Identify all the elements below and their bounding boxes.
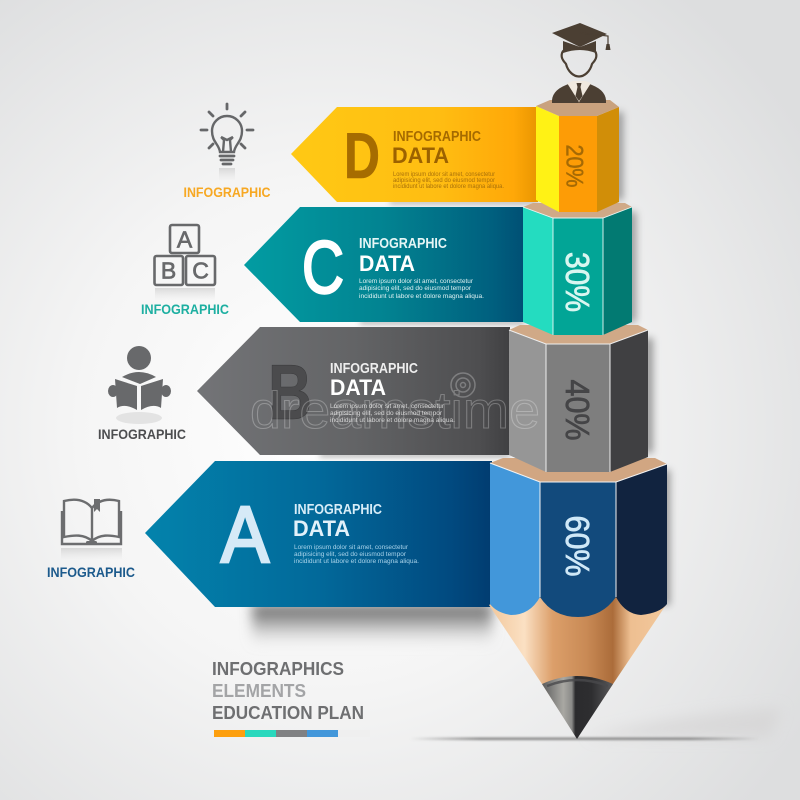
icon: ABC blocks (154, 225, 215, 301)
body text C: adipisicing elit, sed do eiusmod tempor (359, 285, 472, 292)
body text D: incididunt ut labore et dolore magna aliqua. (393, 183, 504, 190)
label: reader infographic: INFOGRAPHIC (98, 426, 186, 442)
icon: ABC blocks: B (161, 258, 176, 284)
title line 1: INFOGRAPHICS (212, 658, 344, 679)
icon: reading person (108, 346, 171, 424)
icon: light bulb (201, 104, 253, 181)
body text A: adipisicing elit, sed do eiusmod tempor (294, 551, 407, 558)
percent 40: 40% (559, 380, 596, 440)
icon: ABC blocks: A (177, 226, 193, 252)
heading C: INFOGRAPHIC (359, 236, 447, 252)
color legend bar (214, 730, 370, 737)
icon: graduate (552, 23, 610, 103)
body text D (393, 171, 504, 190)
body text C: incididunt ut labore et dolore magna aliqua. (359, 293, 484, 300)
body text B: Lorem ipsum dolor sit amet, consectetur (330, 403, 445, 410)
heading B: INFOGRAPHIC (330, 361, 418, 377)
letter D: D (344, 119, 380, 192)
label: book infographic: INFOGRAPHIC (47, 564, 135, 580)
body text A (294, 544, 419, 565)
subheading A: DATA (293, 516, 350, 541)
percent 20: 20% (560, 144, 587, 188)
panel: arrow B (197, 327, 510, 455)
subheading B: DATA (330, 375, 386, 400)
body text C (359, 278, 484, 300)
watermark: dreamstime (250, 382, 540, 440)
pencil body segment D 20% (536, 100, 619, 212)
pencil tip (489, 590, 666, 739)
pencil body segment A 60% (490, 458, 667, 617)
body text B: adipisicing elit, sed do eiusmod tempor (330, 410, 443, 417)
label: lightbulb infographic: INFOGRAPHIC (184, 184, 270, 200)
icon: ABC blocks: C (192, 258, 209, 284)
ground shadow of pencil (410, 708, 782, 740)
pencil body segment B 40% (509, 325, 648, 472)
letter B: B (268, 348, 312, 436)
percent 60: 60% (559, 516, 596, 576)
pencil lead (542, 676, 613, 739)
drop shadows behind panels (252, 112, 670, 646)
body text B (330, 403, 455, 424)
title line 3: EDUCATION PLAN (212, 702, 364, 723)
panel: arrow D (291, 107, 538, 202)
percent 30: 30% (559, 252, 596, 312)
body text B: incididunt ut labore et dolore magna aliqua. (330, 417, 455, 424)
heading D: INFOGRAPHIC (393, 129, 481, 145)
pencil wood (489, 590, 666, 738)
subheading D: DATA (392, 143, 449, 168)
title line 2: ELEMENTS (212, 680, 306, 701)
letter C: C (302, 226, 344, 309)
label: ABC infographic: INFOGRAPHIC (141, 301, 229, 317)
letter A: A (221, 490, 270, 579)
body text D: adipisicing elit, sed do eiusmod tempor (393, 177, 496, 184)
body text A: Lorem ipsum dolor sit amet, consectetur (294, 544, 409, 551)
heading A: INFOGRAPHIC (294, 502, 382, 518)
body text A: incididunt ut labore et dolore magna aliqua. (294, 558, 419, 565)
body text D: Lorem ipsum dolor sit amet, consectetur (393, 171, 496, 178)
subheading C: DATA (359, 251, 415, 276)
icon: open book (61, 499, 122, 560)
pencil body segment C 30% (523, 203, 632, 335)
body text C: Lorem ipsum dolor sit amet, consectetur (359, 278, 474, 285)
title block (212, 658, 364, 723)
panel: arrow A (145, 461, 492, 607)
panel: arrow C (244, 207, 525, 322)
